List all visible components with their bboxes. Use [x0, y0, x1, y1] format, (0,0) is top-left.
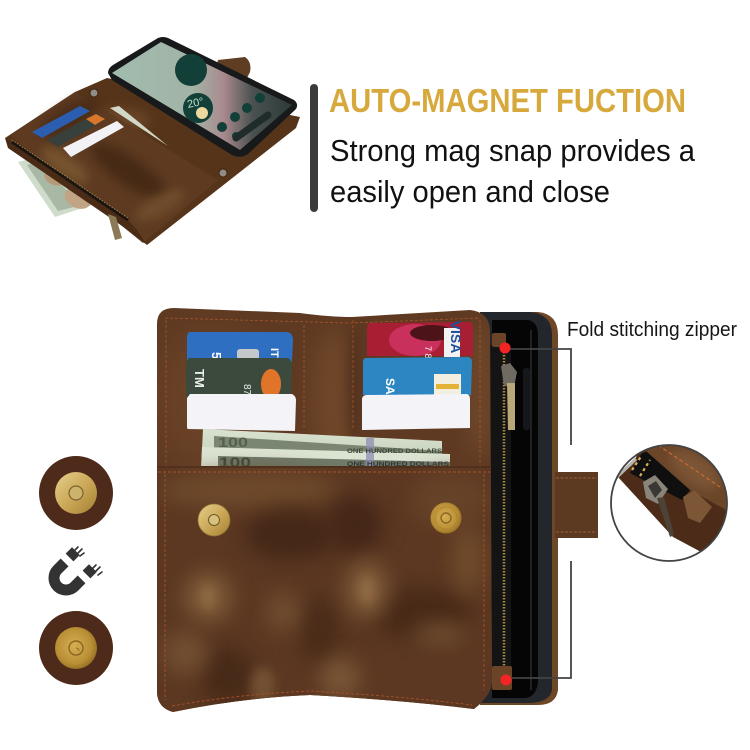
body text: easily open and close [330, 174, 610, 209]
card: dark green ATM card: TM [192, 369, 207, 388]
card: blue bank card: IT [268, 348, 280, 358]
leather surfaces [618, 450, 726, 552]
card: blue bank card [187, 332, 293, 362]
card: red Visa [367, 321, 473, 359]
interior stitching [165, 318, 480, 466]
callout red dots [500, 342, 512, 686]
phone widgets [175, 54, 268, 140]
cards in flap [32, 106, 124, 157]
zoom detail circle: zipper close-up [610, 444, 728, 562]
banknotes: ONE HUNDRED DOLLARS [347, 449, 442, 455]
heading: AUTO-MAGNET FUCTION [329, 82, 686, 119]
open wallet interior [150, 300, 495, 726]
icon: horseshoe magnet [49, 547, 102, 595]
banknotes [201, 429, 450, 470]
card: dark green ATM card [186, 358, 292, 399]
card: white blank left [187, 394, 296, 431]
pull tab [657, 497, 674, 537]
phone widgets: 20° [186, 96, 205, 111]
wallet body [5, 78, 300, 245]
vertical accent bar [310, 84, 318, 212]
magnetic snap: raised left [198, 504, 230, 536]
zipper tape [630, 452, 690, 500]
product photo: open wallet with phone, angled view [0, 37, 310, 255]
banknotes: 100 [219, 454, 251, 470]
card: light blue Visa: SA [383, 378, 397, 395]
wallet strap clasp [555, 472, 598, 538]
card: blue bank card: 5 [209, 352, 224, 359]
brown end tab [683, 490, 712, 523]
lower edge of wallet [5, 138, 147, 245]
body text: Strong mag snap provides a [330, 133, 696, 168]
wallet flap with card slots [5, 91, 218, 245]
phone case behind wallet [480, 312, 558, 705]
front pocket flap [150, 466, 495, 726]
banknote edge [110, 106, 168, 146]
card: red Visa: VISA [448, 321, 464, 353]
callout connector lines [505, 349, 571, 678]
cash and coins in zip pocket [18, 156, 95, 217]
wallet clasp strap [215, 57, 250, 84]
magnetic snap: spiral right [430, 502, 462, 534]
banknotes: 100 [218, 434, 248, 450]
magnet closed-side sample [39, 456, 113, 530]
card: red Visa: 7 8 [423, 346, 433, 359]
card: dark green ATM card: 87 [241, 384, 252, 396]
body text [330, 133, 696, 209]
zipper pull [501, 363, 530, 430]
smartphone [108, 37, 297, 157]
callout label: Fold stitching zipper [567, 319, 737, 341]
wallet snap rivets [90, 89, 227, 177]
magnet spiral-side sample [39, 611, 113, 685]
card: light blue Visa [363, 357, 472, 395]
zipper [490, 333, 530, 690]
card: white blank right [362, 394, 470, 430]
banknotes: ONE HUNDRED DOLLARS [347, 462, 449, 468]
zipper pull [108, 214, 122, 240]
slider [643, 475, 668, 504]
